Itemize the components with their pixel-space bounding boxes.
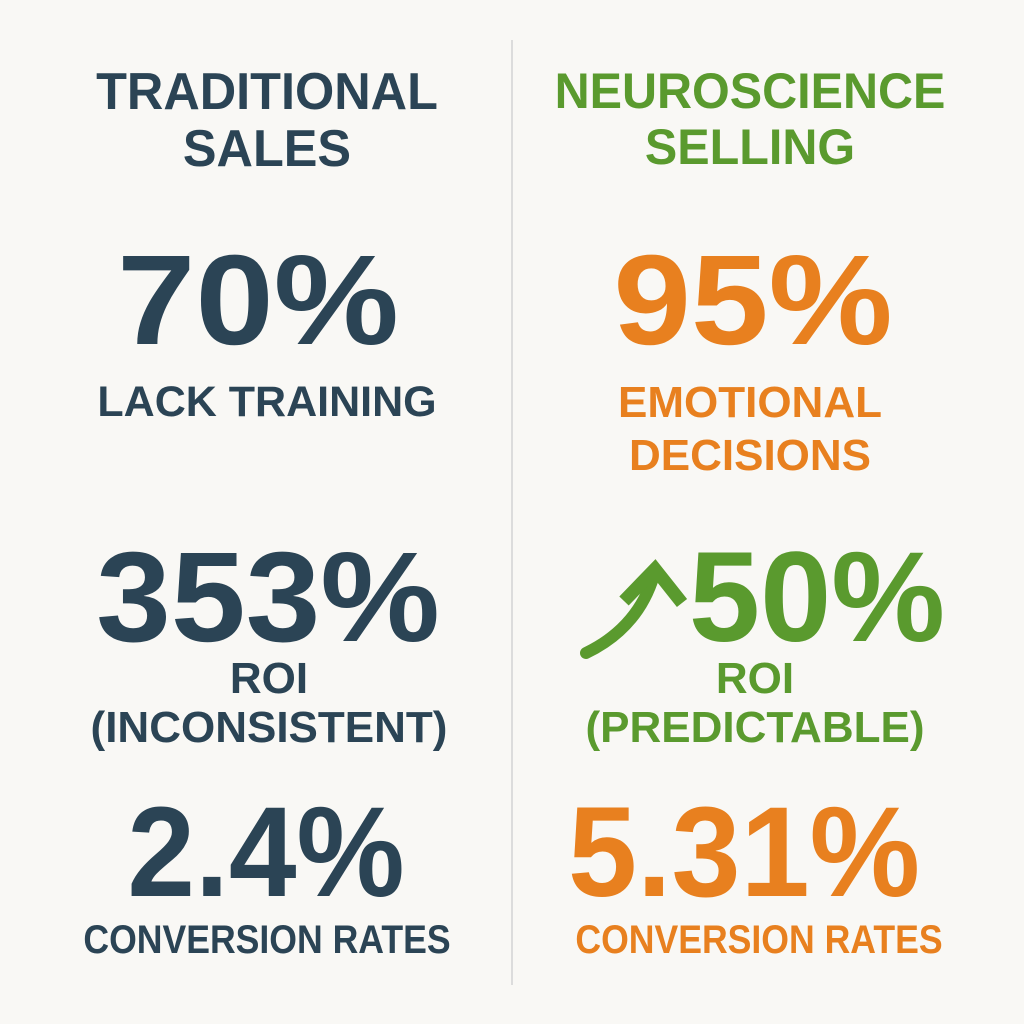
heading: traditional sales: TRADITIONAL <box>96 63 438 121</box>
label: roi predictable: ROI <box>716 654 794 703</box>
label: roi inconsistent: ROI <box>230 654 308 703</box>
label: roi inconsistent <box>91 654 447 752</box>
label: roi predictable <box>586 654 924 752</box>
heading: traditional sales <box>96 63 438 178</box>
stat: 50%: 50% <box>689 526 945 669</box>
heading: neuroscience selling: NEUROSCIENCE <box>555 63 945 119</box>
heading: neuroscience selling <box>555 63 945 175</box>
heading: traditional sales: SALES <box>183 120 351 178</box>
divider <box>511 40 513 985</box>
stat: 70%: 70% <box>117 229 399 372</box>
stat: 353%: 353% <box>96 526 440 669</box>
label: roi predictable: (PREDICTABLE) <box>586 703 924 752</box>
icon: curved up arrow <box>580 559 687 659</box>
label: emotional decisions: EMOTIONAL <box>618 378 882 427</box>
label: emotional decisions: DECISIONS <box>629 431 871 480</box>
label: emotional decisions <box>618 378 882 480</box>
stat: 2.4%: 2.4% <box>127 781 405 924</box>
label: conversion rates: CONVERSION RATES <box>83 918 451 962</box>
heading: neuroscience selling: SELLING <box>645 119 855 175</box>
label: conversion rates: CONVERSION RATES <box>575 918 943 962</box>
stat: 5.31%: 5.31% <box>568 781 920 924</box>
stat: 95%: 95% <box>613 229 893 372</box>
label: lack training: LACK TRAINING <box>97 378 437 426</box>
panel: traditional sales <box>83 63 451 962</box>
label: roi inconsistent: (INCONSISTENT) <box>91 703 447 752</box>
